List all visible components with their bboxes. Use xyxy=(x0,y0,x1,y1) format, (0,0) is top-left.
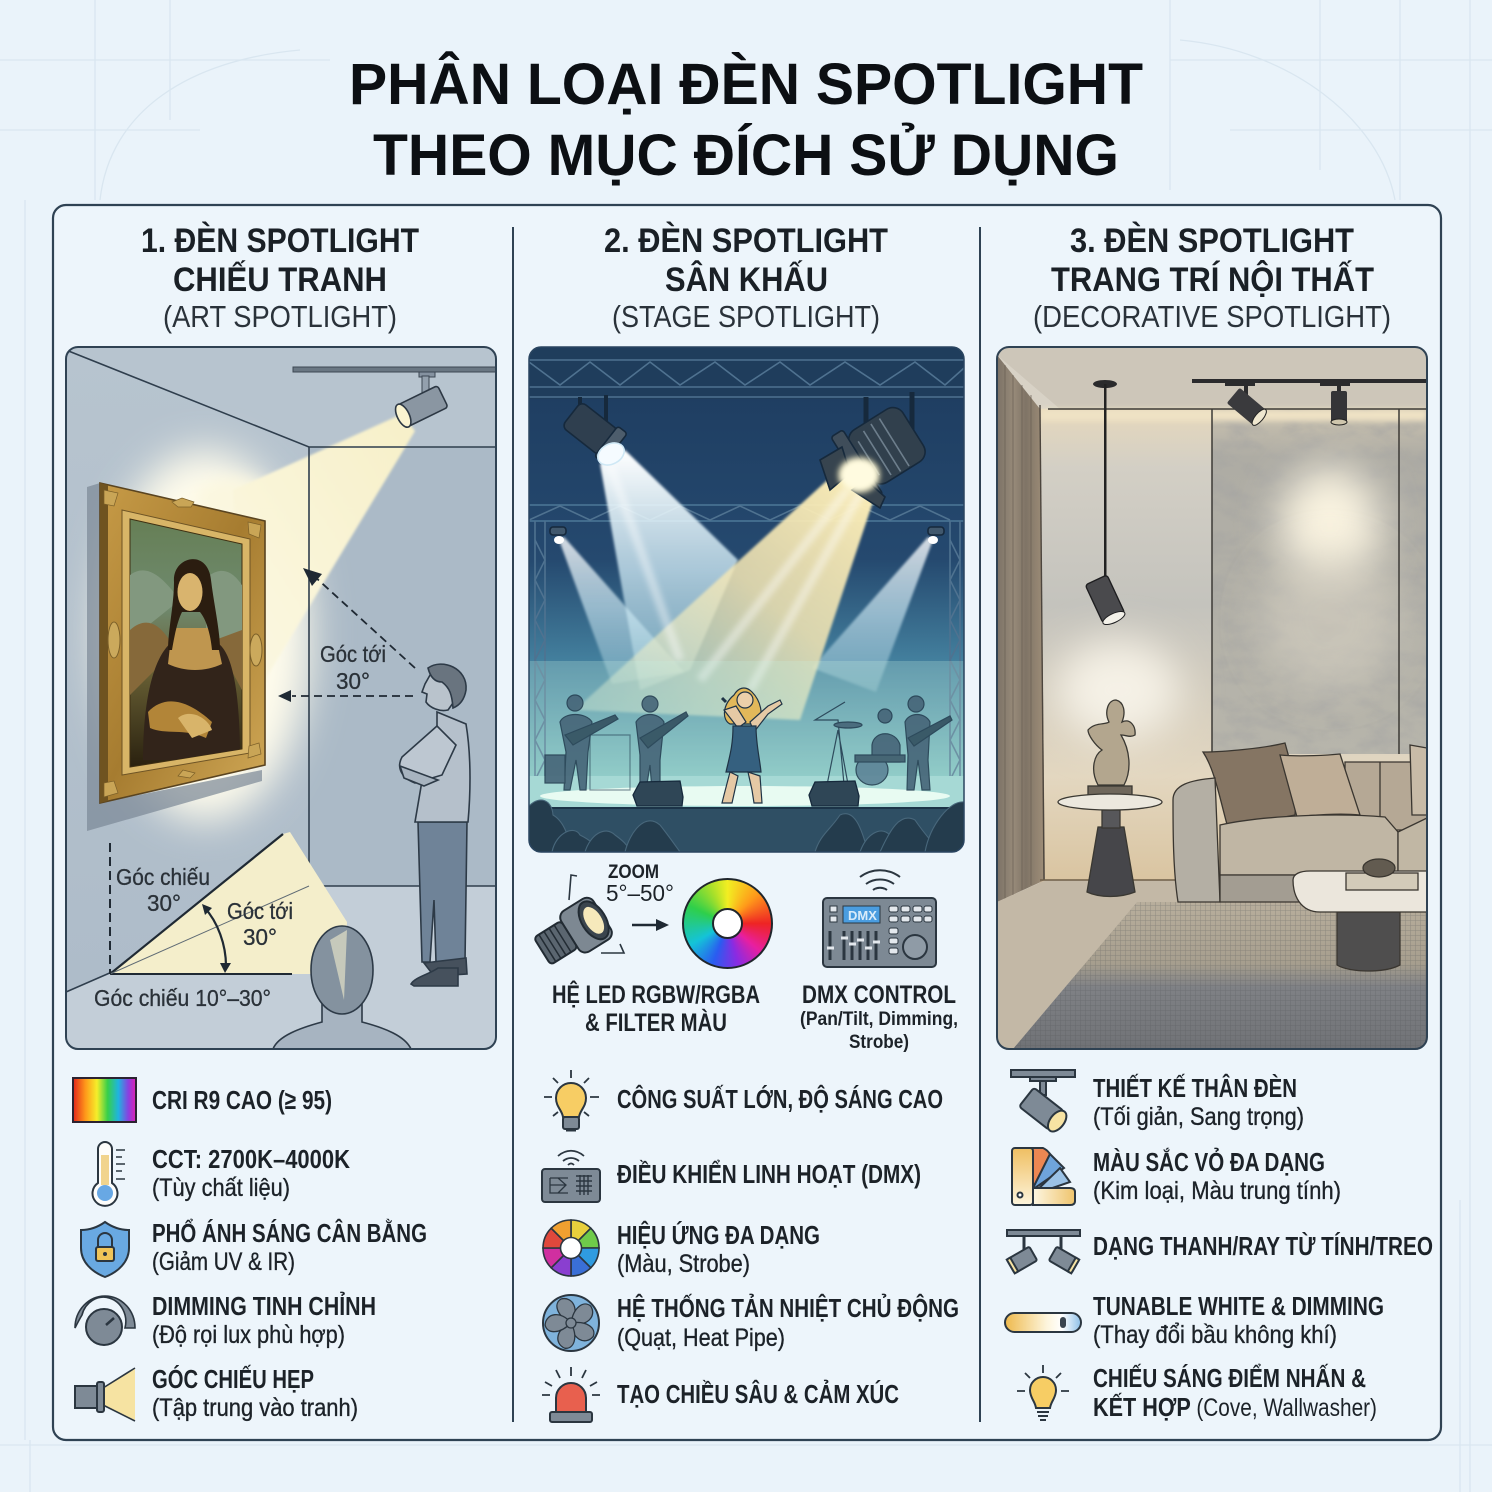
text: narrow angle: (Tập trung vào tranh) xyxy=(152,1394,358,1422)
title: THEO MỤC ĐÍCH SỬ DỤNG xyxy=(373,123,1119,188)
text: CCT: CCT: 2700K–4000K xyxy=(152,1144,350,1174)
track rail with spotlights xyxy=(1192,379,1427,428)
audience silhouettes xyxy=(529,800,964,852)
pendant lamp xyxy=(1085,380,1127,627)
text: dimming: (Độ rọi lux phù hợp) xyxy=(152,1321,345,1349)
heading: stage spotlight: 2. ĐÈN SPOTLIGHT xyxy=(604,222,888,260)
icon: zoom lens xyxy=(530,875,624,972)
band musicians xyxy=(545,695,952,795)
text: spectrum xyxy=(152,1218,427,1276)
illustration: projection angle diagram: Góc chiếu 10°–30° xyxy=(94,985,271,1011)
label: DMX control: (Pan/Tilt, Dimming, xyxy=(800,1009,958,1030)
text: CCT xyxy=(152,1144,350,1202)
label: incidence angle: Góc tới xyxy=(320,641,386,667)
text: narrow angle: GÓC CHIẾU HẸP xyxy=(152,1364,314,1394)
label: DMX control: DMX CONTROL xyxy=(802,981,956,1009)
icon: colour swatches xyxy=(1012,1148,1075,1205)
title: PHÂN LOẠI ĐÈN SPOTLIGHT xyxy=(349,52,1143,117)
text: housing colours: (Kim loại, Màu trung tính) xyxy=(1093,1177,1341,1205)
heading: decorative spotlight: (DECORATIVE SPOTLIGHT) xyxy=(1033,299,1391,334)
sofa xyxy=(1173,743,1427,902)
light beams xyxy=(529,450,964,806)
heading: art spotlight: CHIẾU TRANH xyxy=(173,261,387,299)
icon: light bulb xyxy=(544,1070,599,1130)
text: spectrum: PHỔ ÁNH SÁNG CÂN BẰNG xyxy=(152,1218,427,1248)
title xyxy=(349,52,1143,188)
illustration: standing man xyxy=(400,664,470,986)
text: tunable white: TUNABLE WHITE & DIMMING xyxy=(1093,1291,1384,1321)
text: dimming xyxy=(152,1291,376,1349)
text: CCT: (Tùy chất liệu) xyxy=(152,1174,290,1202)
panel: art gallery illustration xyxy=(66,347,496,1049)
coffee table xyxy=(1293,859,1427,971)
label: incidence angle xyxy=(320,644,385,690)
list: stage spotlight features xyxy=(542,1070,959,1422)
icon: track rail and lamp xyxy=(293,367,496,430)
icon: shield with lock xyxy=(81,1222,129,1277)
label: LED RGBW: HỆ LED RGBW/RGBA xyxy=(552,979,760,1009)
text: effects xyxy=(617,1220,820,1278)
text: DMX control: ĐIỀU KHIỂN LINH HOẠT (DMX) xyxy=(617,1159,921,1189)
heading: art spotlight xyxy=(141,222,419,334)
truss structure xyxy=(529,347,964,790)
heading: decorative spotlight xyxy=(1033,222,1391,334)
text: narrow angle xyxy=(152,1364,358,1422)
text: cooling: HỆ THỐNG TẢN NHIỆT CHỦ ĐỘNG xyxy=(617,1292,959,1323)
label: incidence angle: 30° xyxy=(336,668,370,694)
text: body design: (Tối giản, Sang trọng) xyxy=(1093,1103,1304,1131)
icon: accent bulb xyxy=(1017,1365,1069,1420)
floor xyxy=(998,880,1178,1048)
icon: effects colour wheel xyxy=(543,1220,599,1276)
heading: art spotlight: (ART SPOTLIGHT) xyxy=(163,299,397,334)
text: cooling: (Quạt, Heat Pipe) xyxy=(617,1324,785,1352)
icon: thermometer xyxy=(93,1142,125,1206)
text: accent lighting: CHIẾU SÁNG ĐIỂM NHẤN & xyxy=(1093,1363,1366,1393)
heading: art spotlight: 1. ĐÈN SPOTLIGHT xyxy=(141,222,419,260)
text: effects: (Màu, Strobe) xyxy=(617,1250,750,1278)
icon: tunable white slider xyxy=(1005,1313,1081,1332)
heading: stage spotlight: (STAGE SPOTLIGHT) xyxy=(612,299,880,334)
text: effects: HIỆU ỨNG ĐA DẠNG xyxy=(617,1220,820,1250)
rug xyxy=(1013,902,1427,1049)
floor monitor speakers xyxy=(633,781,859,806)
text: power: CÔNG SUẤT LỚN, ĐỘ SÁNG CAO xyxy=(617,1084,943,1114)
arrows: viewing direction xyxy=(278,568,415,702)
label: LED RGBW: & FILTER MÀU xyxy=(585,1008,727,1037)
list: art spotlight features xyxy=(73,1078,427,1422)
illustration: viewer from behind xyxy=(273,926,411,1049)
icon: colour spectrum xyxy=(73,1078,136,1122)
text: depth: TẠO CHIỀU SÂU & CẢM XÚC xyxy=(617,1379,899,1409)
icon: DMX console: DMX xyxy=(848,908,877,923)
text: tunable white xyxy=(1093,1291,1384,1349)
heading: decorative spotlight: 3. ĐÈN SPOTLIGHT xyxy=(1070,222,1354,260)
label: zoom range xyxy=(606,862,674,906)
text: housing colours xyxy=(1093,1146,1341,1205)
illustration: projection angle diagram: Góc tới xyxy=(227,898,293,924)
panel: interior living room illustration xyxy=(997,347,1427,1049)
illustration: framed painting xyxy=(87,483,265,831)
icon: track spotlight xyxy=(1011,1070,1075,1135)
text: dimming: DIMMING TINH CHỈNH xyxy=(152,1291,376,1321)
illustration: projection angle diagram xyxy=(94,832,347,1011)
heading: decorative spotlight: TRANG TRÍ NỘI THẤT xyxy=(1051,260,1374,299)
text: body design: THIẾT KẾ THÂN ĐÈN xyxy=(1093,1073,1297,1103)
text: CRI: CRI R9 CAO (≥ 95) xyxy=(152,1085,332,1115)
icon: DMX keypad xyxy=(542,1151,600,1202)
icon: RGB colour wheel xyxy=(682,878,773,969)
singer xyxy=(722,688,782,803)
list: decorative spotlight features xyxy=(1005,1070,1433,1422)
label: zoom range: ZOOM xyxy=(608,862,659,883)
heading: stage spotlight xyxy=(604,222,888,334)
icon: narrow beam xyxy=(75,1368,135,1421)
text: housing colours: MÀU SẮC VỎ ĐA DẠNG xyxy=(1093,1146,1325,1177)
text: cooling xyxy=(617,1292,959,1352)
icon: DMX console xyxy=(823,870,936,967)
main panel xyxy=(53,205,1441,1440)
icon: double track spotlight xyxy=(1007,1230,1080,1273)
stage floor xyxy=(529,776,964,852)
sculpture on side table xyxy=(1058,700,1162,896)
illustration: projection angle diagram: Góc chiếu xyxy=(116,864,210,890)
label: DMX control xyxy=(800,981,958,1053)
text: accent lighting xyxy=(1093,1363,1377,1422)
label: zoom range: 5°–50° xyxy=(606,880,674,906)
text: body design xyxy=(1093,1073,1304,1131)
stage lamps xyxy=(550,392,944,544)
column dividers xyxy=(513,227,980,1422)
panel: concert stage illustration xyxy=(529,347,964,852)
curtain xyxy=(997,355,1045,902)
icon: dimmer knob xyxy=(75,1296,135,1345)
illustration: projection angle diagram: 30° xyxy=(147,890,181,916)
icon: cooling fan xyxy=(543,1295,599,1351)
illustration: projection angle diagram: 30° xyxy=(243,924,277,950)
text: spectrum: (Giảm UV & IR) xyxy=(152,1248,295,1276)
icon: red beacon xyxy=(542,1367,600,1422)
label: DMX control: Strobe) xyxy=(849,1032,909,1053)
text: accent lighting: KẾT HỢP (Cove, Wallwasher) xyxy=(1093,1392,1377,1422)
label: LED RGBW xyxy=(552,979,760,1037)
heading: stage spotlight: SÂN KHẤU xyxy=(665,261,828,299)
arrow: zoom to colour wheel xyxy=(632,919,669,931)
text: tunable white: (Thay đổi bầu không khí) xyxy=(1093,1321,1337,1349)
